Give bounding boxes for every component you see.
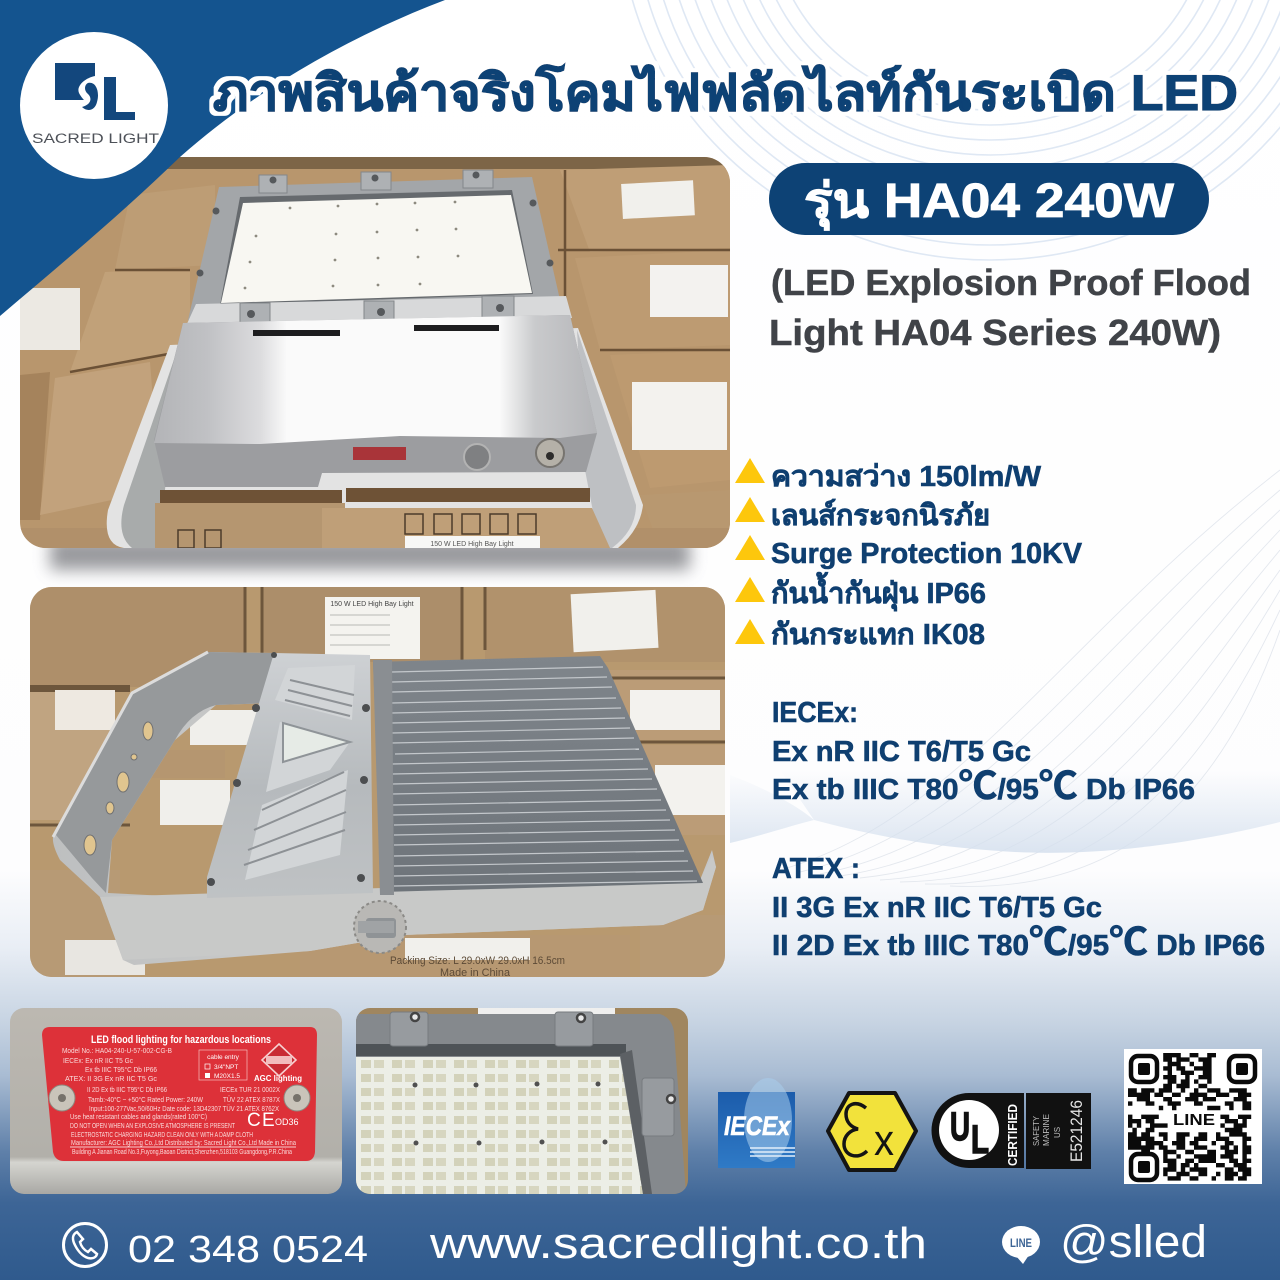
red nameplate: IECEx TUR 21 0002X (220, 1085, 280, 1094)
footer: website: www.sacredlight.co.th (429, 1219, 927, 1268)
certification logo: Ex: x (874, 1116, 894, 1165)
photo: rear of flood light with heat sink: Packing Size: L 29.0xW 29.0xH 16.5cm (390, 955, 565, 967)
model badge (769, 163, 1209, 235)
ATEX certification text: II 2D Ex tb IIIC T80℃/95℃ Db IP66 (772, 922, 1265, 964)
lamp frame (188, 177, 563, 320)
red nameplate: ELECTROSTATIC CHARGING HAZARD CLEAN ONLY WITH A DAMP CLOTH (71, 1130, 253, 1139)
icon: LINE (1002, 1226, 1040, 1264)
ATEX certification text: II 3G Ex nR IIC T6/T5 Gc (772, 892, 1102, 924)
photo: red nameplate (10, 1008, 342, 1194)
red nameplate (42, 1027, 317, 1161)
wave band (730, 770, 1280, 853)
certification logo: Ex (828, 1093, 916, 1170)
ATEX certification text: ATEX : (772, 853, 860, 885)
bracket (53, 652, 716, 965)
red nameplate: cable entry (207, 1054, 240, 1061)
QR code (1124, 1049, 1262, 1184)
certification logo: UL Certified: L (971, 1118, 989, 1162)
photo: front of flood light on cartons: 150 W LED High Bay Light (430, 541, 514, 548)
ATEX certification text (772, 853, 1265, 964)
photo: front of flood light on cartons (20, 157, 740, 548)
icon: bullet triangles (735, 458, 765, 644)
photo: rear of flood light with heat sink (30, 587, 725, 979)
footer: LINE handle (1002, 1216, 1207, 1267)
title: ภาพสินค้าจริงโคมไฟฟลัดไลท์กันระเบิด LED (213, 63, 1238, 121)
blue corner shape (0, 0, 445, 316)
certification logo: IECEx: IECEx (724, 1111, 791, 1141)
red nameplate: E (262, 1110, 275, 1131)
lamp housing (154, 315, 597, 487)
feature list: กันกระแทก IK08 (771, 619, 985, 651)
certification logo: UL Certified (932, 1093, 1091, 1169)
red nameplate: AGC lighting (254, 1074, 302, 1083)
red nameplate: 3/4"NPT (214, 1064, 238, 1071)
feature list: เลนส์กระจกนิรภัย (771, 498, 990, 532)
feature list: กันน้ำกันฝุ่น IP66 (771, 571, 986, 611)
certification logo: UL Certified: MARINE (1042, 1114, 1051, 1146)
model badge: รุ่น HA04 240W (804, 175, 1175, 231)
logo badge (20, 32, 168, 179)
red nameplate: Model No.: HA04-240-U-57-002-CG-B (62, 1046, 172, 1055)
QR code: LINE (1173, 1112, 1215, 1129)
photo: LED module close-up (356, 1008, 688, 1194)
footer: LINE handle: @slled (1060, 1216, 1207, 1267)
certification logo: UL Certified: US (1053, 1127, 1062, 1138)
logo wordmark: SACRED LIGHT (32, 131, 159, 146)
IECEx certification text: Ex tb IIIC T80℃/95℃ Db IP66 (772, 766, 1195, 808)
red nameplate: ATEX: II 3G Ex nR IIC T5 Gc (65, 1074, 157, 1083)
certification logo: UL Certified: U (950, 1105, 970, 1149)
photo: rear of flood light with heat sink: 150 W LED High Bay Light (330, 601, 414, 608)
icon: phone (64, 1224, 106, 1266)
red nameplate: II 2D Ex tb IIIC T95°C Db IP66 (87, 1085, 167, 1094)
feature list: ความสว่าง 150lm/W (771, 461, 1042, 493)
footer: phone (64, 1224, 368, 1271)
red nameplate: Tamb:-40°C ~ +50°C Rated Power: 240W (88, 1095, 204, 1104)
red nameplate: Building A Jianan Road No.3,Fuyong,Baoan District,Shenzhen,518103 Guangdong,P.R.China (72, 1147, 293, 1156)
product subtitle: Light HA04 Series 240W) (769, 312, 1221, 353)
red nameplate: Input:100-277Vac,50/60Hz Date code: 13D42307 TÜV 21 ATEX 8762X (89, 1104, 279, 1113)
cover plate (207, 653, 373, 898)
icon: LINE: LINE (1010, 1236, 1032, 1250)
red nameplate: IECEx: Ex nR IIC T5 Gc (63, 1056, 133, 1065)
red nameplate: C (247, 1110, 261, 1131)
red nameplate: M20X1.5 (214, 1073, 240, 1080)
certification logo: UL Certified: E521246 (1067, 1100, 1086, 1162)
certification logo: IECEx (718, 1078, 795, 1168)
IECEx certification text: Ex nR IIC T6/T5 Gc (772, 736, 1031, 768)
feature list: Surge Protection 10KV (771, 538, 1083, 570)
feature list (735, 458, 1083, 651)
heat sink (373, 656, 703, 892)
red nameplate: Ex tb IIIC T95°C Db IP66 (85, 1065, 157, 1074)
certification logo: UL Certified: CERTIFIED (1006, 1104, 1020, 1166)
red nameplate: Manufacturer: AGC Lighting Co.,Ltd Distributed by: Sacred Light Co.,Ltd Made in China (71, 1138, 297, 1147)
red nameplate: LED flood lighting for hazardous locations (91, 1034, 271, 1046)
IECEx certification text: IECEx: (772, 697, 858, 729)
product subtitle: (LED Explosion Proof Flood (771, 262, 1251, 303)
footer: phone: 02 348 0524 (128, 1229, 368, 1271)
IECEx certification text (772, 697, 1195, 808)
mounting bracket front (107, 328, 643, 548)
product subtitle (769, 262, 1251, 353)
red nameplate: DO NOT OPEN WHEN AN EXPLOSIVE ATMOSPHERE IS PRESENT (70, 1121, 235, 1130)
red nameplate: Use heat resistant cables and glands(rated 100°C) (70, 1112, 207, 1121)
certification logo: UL Certified: SAFETY (1032, 1115, 1041, 1146)
photo: rear of flood light with heat sink: Made in China (440, 967, 511, 979)
photo shadow (50, 538, 690, 570)
red nameplate: TÜV 22 ATEX 8787X (223, 1095, 280, 1104)
logo mark (55, 63, 135, 120)
red nameplate: OD36 (275, 1117, 299, 1127)
